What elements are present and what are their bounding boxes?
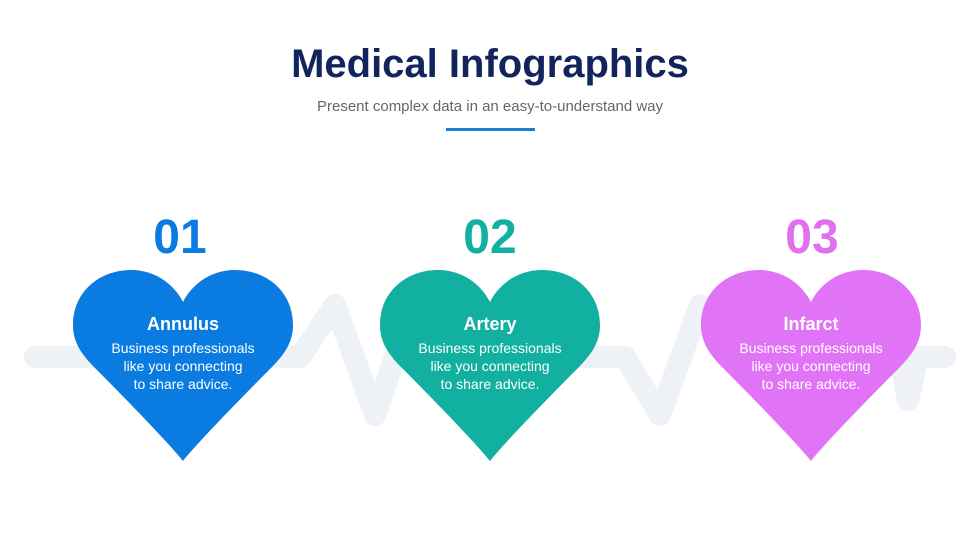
heart card: Annulus: Annulus (147, 314, 219, 334)
heart card: Artery: like you connecting (430, 358, 550, 374)
heart card: Annulus: Business professionals (111, 340, 255, 356)
heart card: Infarct: Business professionals (739, 340, 883, 356)
heart card: Infarct (701, 270, 921, 461)
title: Medical Infographics (291, 42, 689, 86)
heart card: Artery: Artery (463, 314, 517, 334)
heart card: Annulus: like you connecting (123, 358, 243, 374)
number 02: 02 (463, 211, 517, 264)
underline accent (446, 128, 535, 131)
number 03: 03 (785, 211, 839, 264)
subtitle: Present complex data in an easy-to-understand way (317, 98, 663, 115)
heart card: Infarct: Infarct (783, 314, 838, 334)
heart card: Annulus: to share advice. (134, 376, 232, 392)
heart card: Annulus (73, 270, 293, 461)
heart card: Infarct: to share advice. (762, 376, 860, 392)
number 01: 01 (153, 211, 207, 264)
heart card: Infarct: like you connecting (751, 358, 871, 374)
heart card: Artery: to share advice. (441, 376, 539, 392)
heart card: Artery: Business professionals (418, 340, 562, 356)
heart card: Artery (380, 270, 600, 461)
